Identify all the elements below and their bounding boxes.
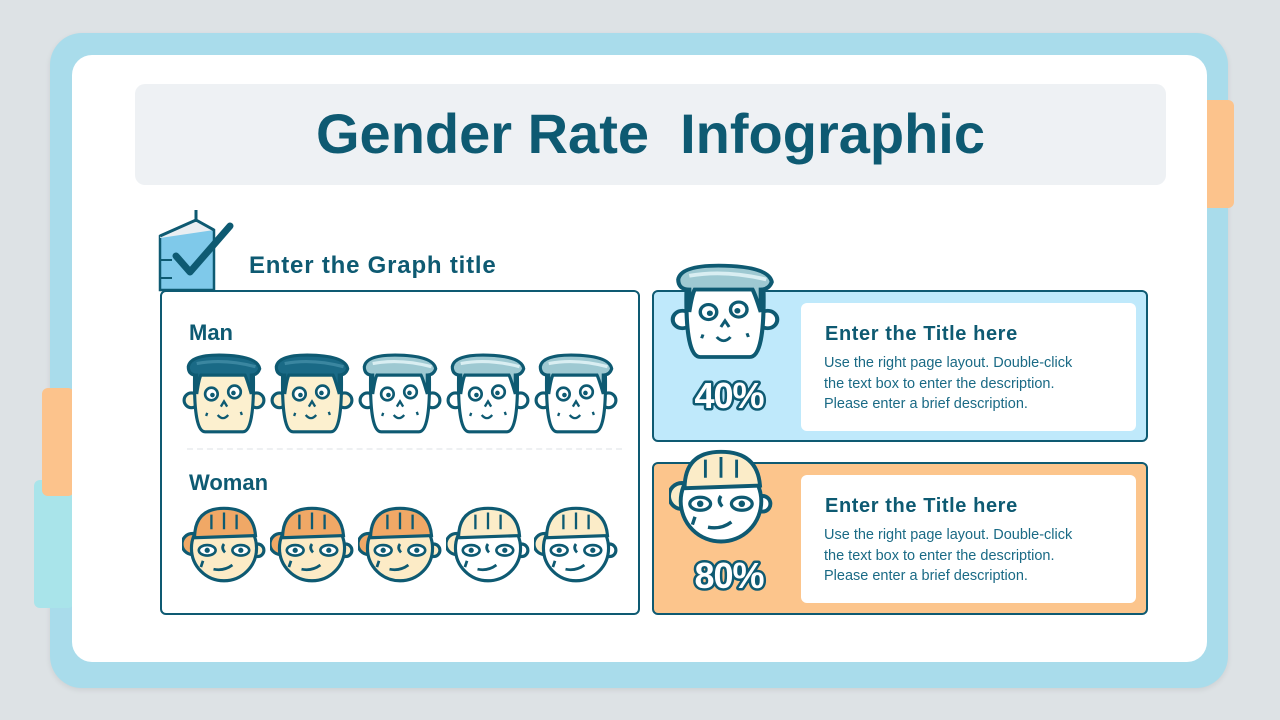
icon: man face [670, 264, 780, 359]
tab: right orange [1200, 100, 1234, 208]
percentage: 40% [694, 375, 765, 416]
text box [801, 475, 1136, 603]
card description: Please enter a brief description. [824, 396, 1028, 412]
title [135, 84, 1166, 185]
tab: left orange [42, 388, 74, 496]
graph title: Enter the Graph title [249, 252, 496, 279]
card description: Please enter a brief description. [824, 568, 1028, 584]
label: Woman: Woman [189, 470, 268, 495]
card title: Enter the Title here [825, 495, 1018, 517]
card description: the text box to enter the description. [824, 376, 1055, 392]
card description [824, 355, 1072, 412]
panel: man stat [652, 290, 1148, 442]
icon: clipboard check [158, 210, 234, 292]
card title: Enter the Title here [825, 323, 1018, 345]
icon: woman face [669, 450, 772, 544]
panel: woman stat [652, 462, 1148, 615]
icons: woman row [182, 506, 618, 582]
card description: the text box to enter the description. [824, 548, 1055, 564]
panel: chart [160, 290, 640, 615]
text box [801, 303, 1136, 431]
card description [824, 527, 1072, 584]
inner white panel [72, 55, 1207, 662]
card description: Use the right page layout. Double-click [824, 527, 1072, 543]
tab: left teal [34, 480, 74, 608]
percentage: 80% [694, 555, 765, 596]
icons: man row [182, 354, 618, 434]
label: Man: Man [189, 320, 233, 345]
card description: Use the right page layout. Double-click [824, 355, 1072, 371]
title: Gender Rate Infographic [316, 102, 985, 165]
